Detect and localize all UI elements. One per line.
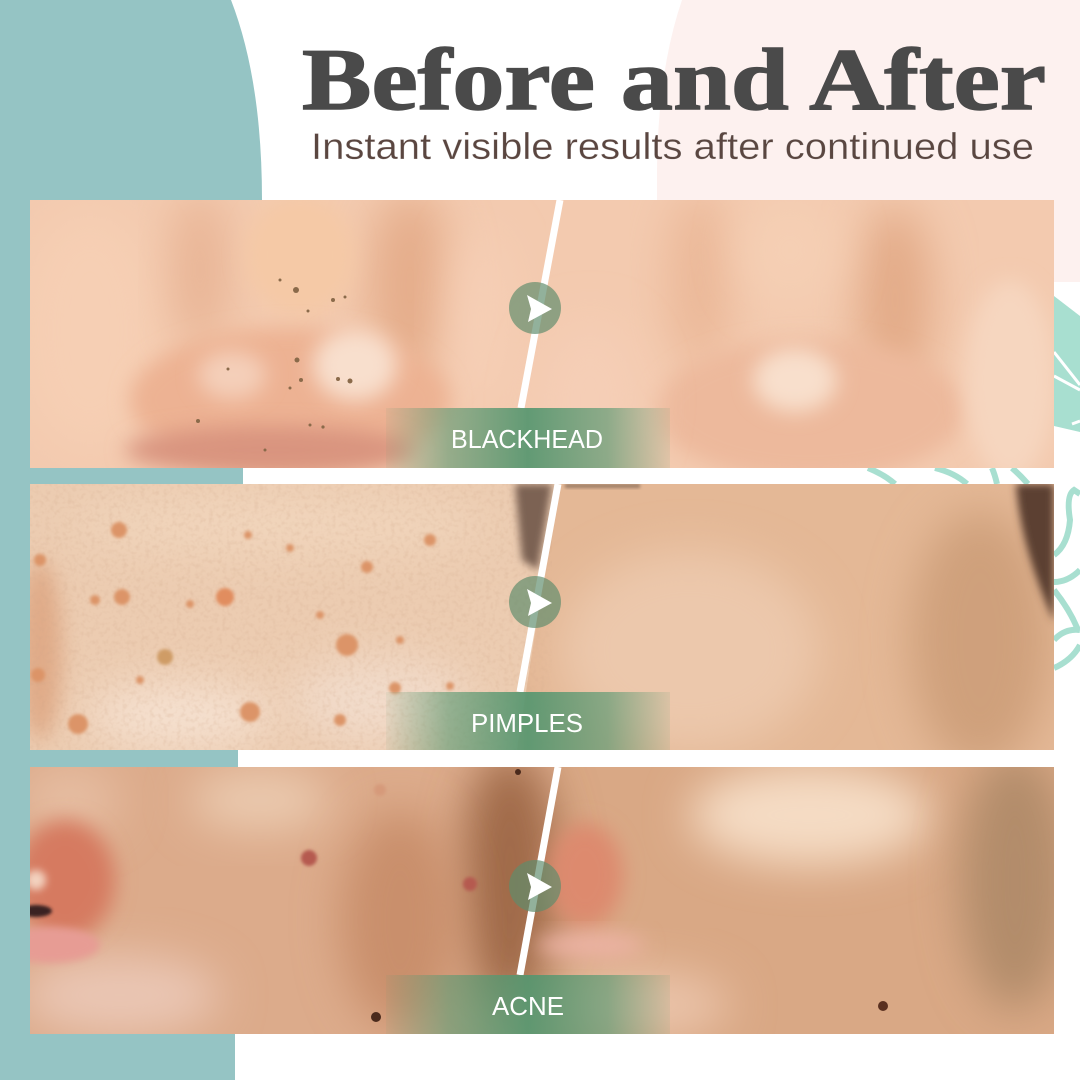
before photo: cheek with acne xyxy=(0,750,560,1035)
decorative leaf outlines xyxy=(868,296,1080,668)
background: pink corner block xyxy=(657,0,1080,282)
subtitle: Instant visible results after continued use xyxy=(311,126,1034,167)
after photo: calmer cheek xyxy=(535,750,1070,1040)
before photo: nose with blackheads xyxy=(122,200,455,468)
after photo: smooth skin with hair xyxy=(560,484,1054,770)
label: pimples: PIMPLES xyxy=(471,708,583,738)
label: acne xyxy=(386,975,670,1034)
background: teal shape xyxy=(0,0,262,1080)
label: acne: ACNE xyxy=(492,991,564,1021)
arrow button: pimples xyxy=(509,576,561,628)
label: blackhead: BLACKHEAD xyxy=(451,424,603,454)
arrow button: blackhead xyxy=(509,282,561,334)
arrow button: acne xyxy=(509,860,561,912)
divider: white slanted lines xyxy=(520,200,560,975)
label: pimples xyxy=(386,692,670,750)
panel: pimples xyxy=(18,484,1054,770)
panel: blackhead xyxy=(20,190,1055,480)
label: blackhead xyxy=(386,408,670,468)
title: Before and After xyxy=(302,32,1046,129)
panel: acne xyxy=(30,767,1054,1034)
after photo: clear nose xyxy=(658,200,1054,468)
before photo: skin with pimples xyxy=(18,484,558,750)
